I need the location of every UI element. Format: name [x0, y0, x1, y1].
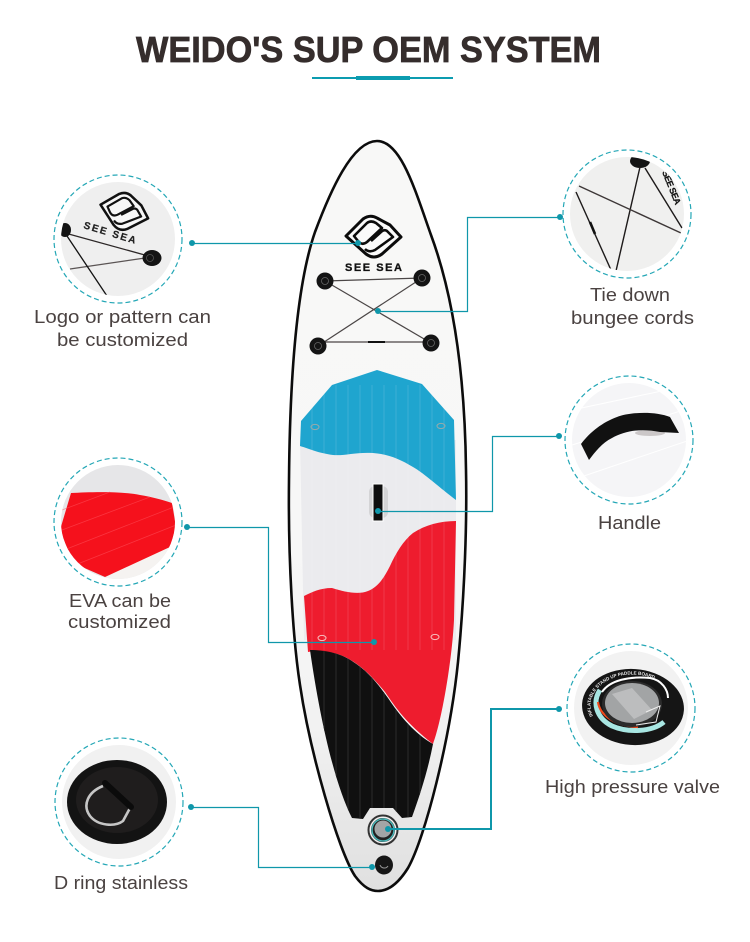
red deck pad — [304, 521, 456, 744]
valve leader line — [388, 709, 559, 829]
bungee anchors — [310, 270, 440, 354]
label: Tie down — [590, 285, 670, 305]
rear D ring — [375, 856, 393, 874]
label — [68, 591, 171, 632]
dashed ring — [567, 644, 695, 772]
photo: bungee detail — [570, 157, 684, 271]
label: Handle — [598, 513, 661, 533]
label — [571, 285, 694, 328]
photo: logo detail: SEE SEA — [82, 220, 137, 247]
photo: handle detail — [572, 383, 686, 497]
board outline — [289, 141, 466, 891]
paddle board — [289, 141, 466, 891]
label: High pressure valve — [545, 777, 720, 797]
dashed ring — [54, 175, 182, 303]
dashed ring — [55, 738, 183, 866]
blue deck pad — [300, 370, 456, 500]
logo wordmark: SEE SEA — [345, 262, 402, 274]
photo: valve detail: INFLATABLE STAND UP PADDLE BOARD — [587, 671, 655, 717]
D ring mounts on deck — [311, 423, 445, 641]
deck pad grooves — [312, 385, 444, 650]
callout: handle — [565, 376, 693, 533]
title underline — [312, 76, 453, 80]
logo on board — [346, 216, 401, 257]
photo: D ring detail — [60, 745, 180, 860]
callout: EVA pad — [54, 458, 185, 632]
callout: valve — [545, 643, 720, 797]
center carry handle — [373, 484, 383, 521]
leader lines — [188, 218, 560, 868]
photo: valve detail — [574, 651, 688, 765]
label: D ring stainless — [54, 873, 188, 893]
photo: EVA detail — [61, 465, 175, 579]
dashed ring — [565, 376, 693, 504]
photo: bungee detail: SEE SEA — [660, 169, 683, 207]
label: customized — [68, 612, 171, 632]
label: Logo or pattern can — [34, 307, 211, 327]
bungee cords — [318, 278, 431, 346]
label: bungee cords — [571, 308, 694, 328]
black deck pad — [310, 650, 433, 819]
dashed ring — [563, 150, 691, 278]
label: EVA can be — [69, 591, 171, 611]
deck grey area — [300, 440, 456, 640]
dashed ring — [54, 458, 182, 586]
callout: logo — [34, 175, 211, 350]
callout: D ring — [54, 738, 188, 893]
inflation valve — [368, 816, 398, 844]
leader line dots — [184, 214, 563, 870]
label — [34, 307, 211, 350]
black pad grooves — [324, 650, 420, 820]
label: be customized — [57, 330, 188, 350]
photo: logo detail — [61, 182, 175, 296]
title: WEIDO'S SUP OEM SYSTEM — [136, 29, 601, 70]
handle shadow — [369, 486, 388, 518]
callout: bungee cords — [563, 150, 694, 328]
